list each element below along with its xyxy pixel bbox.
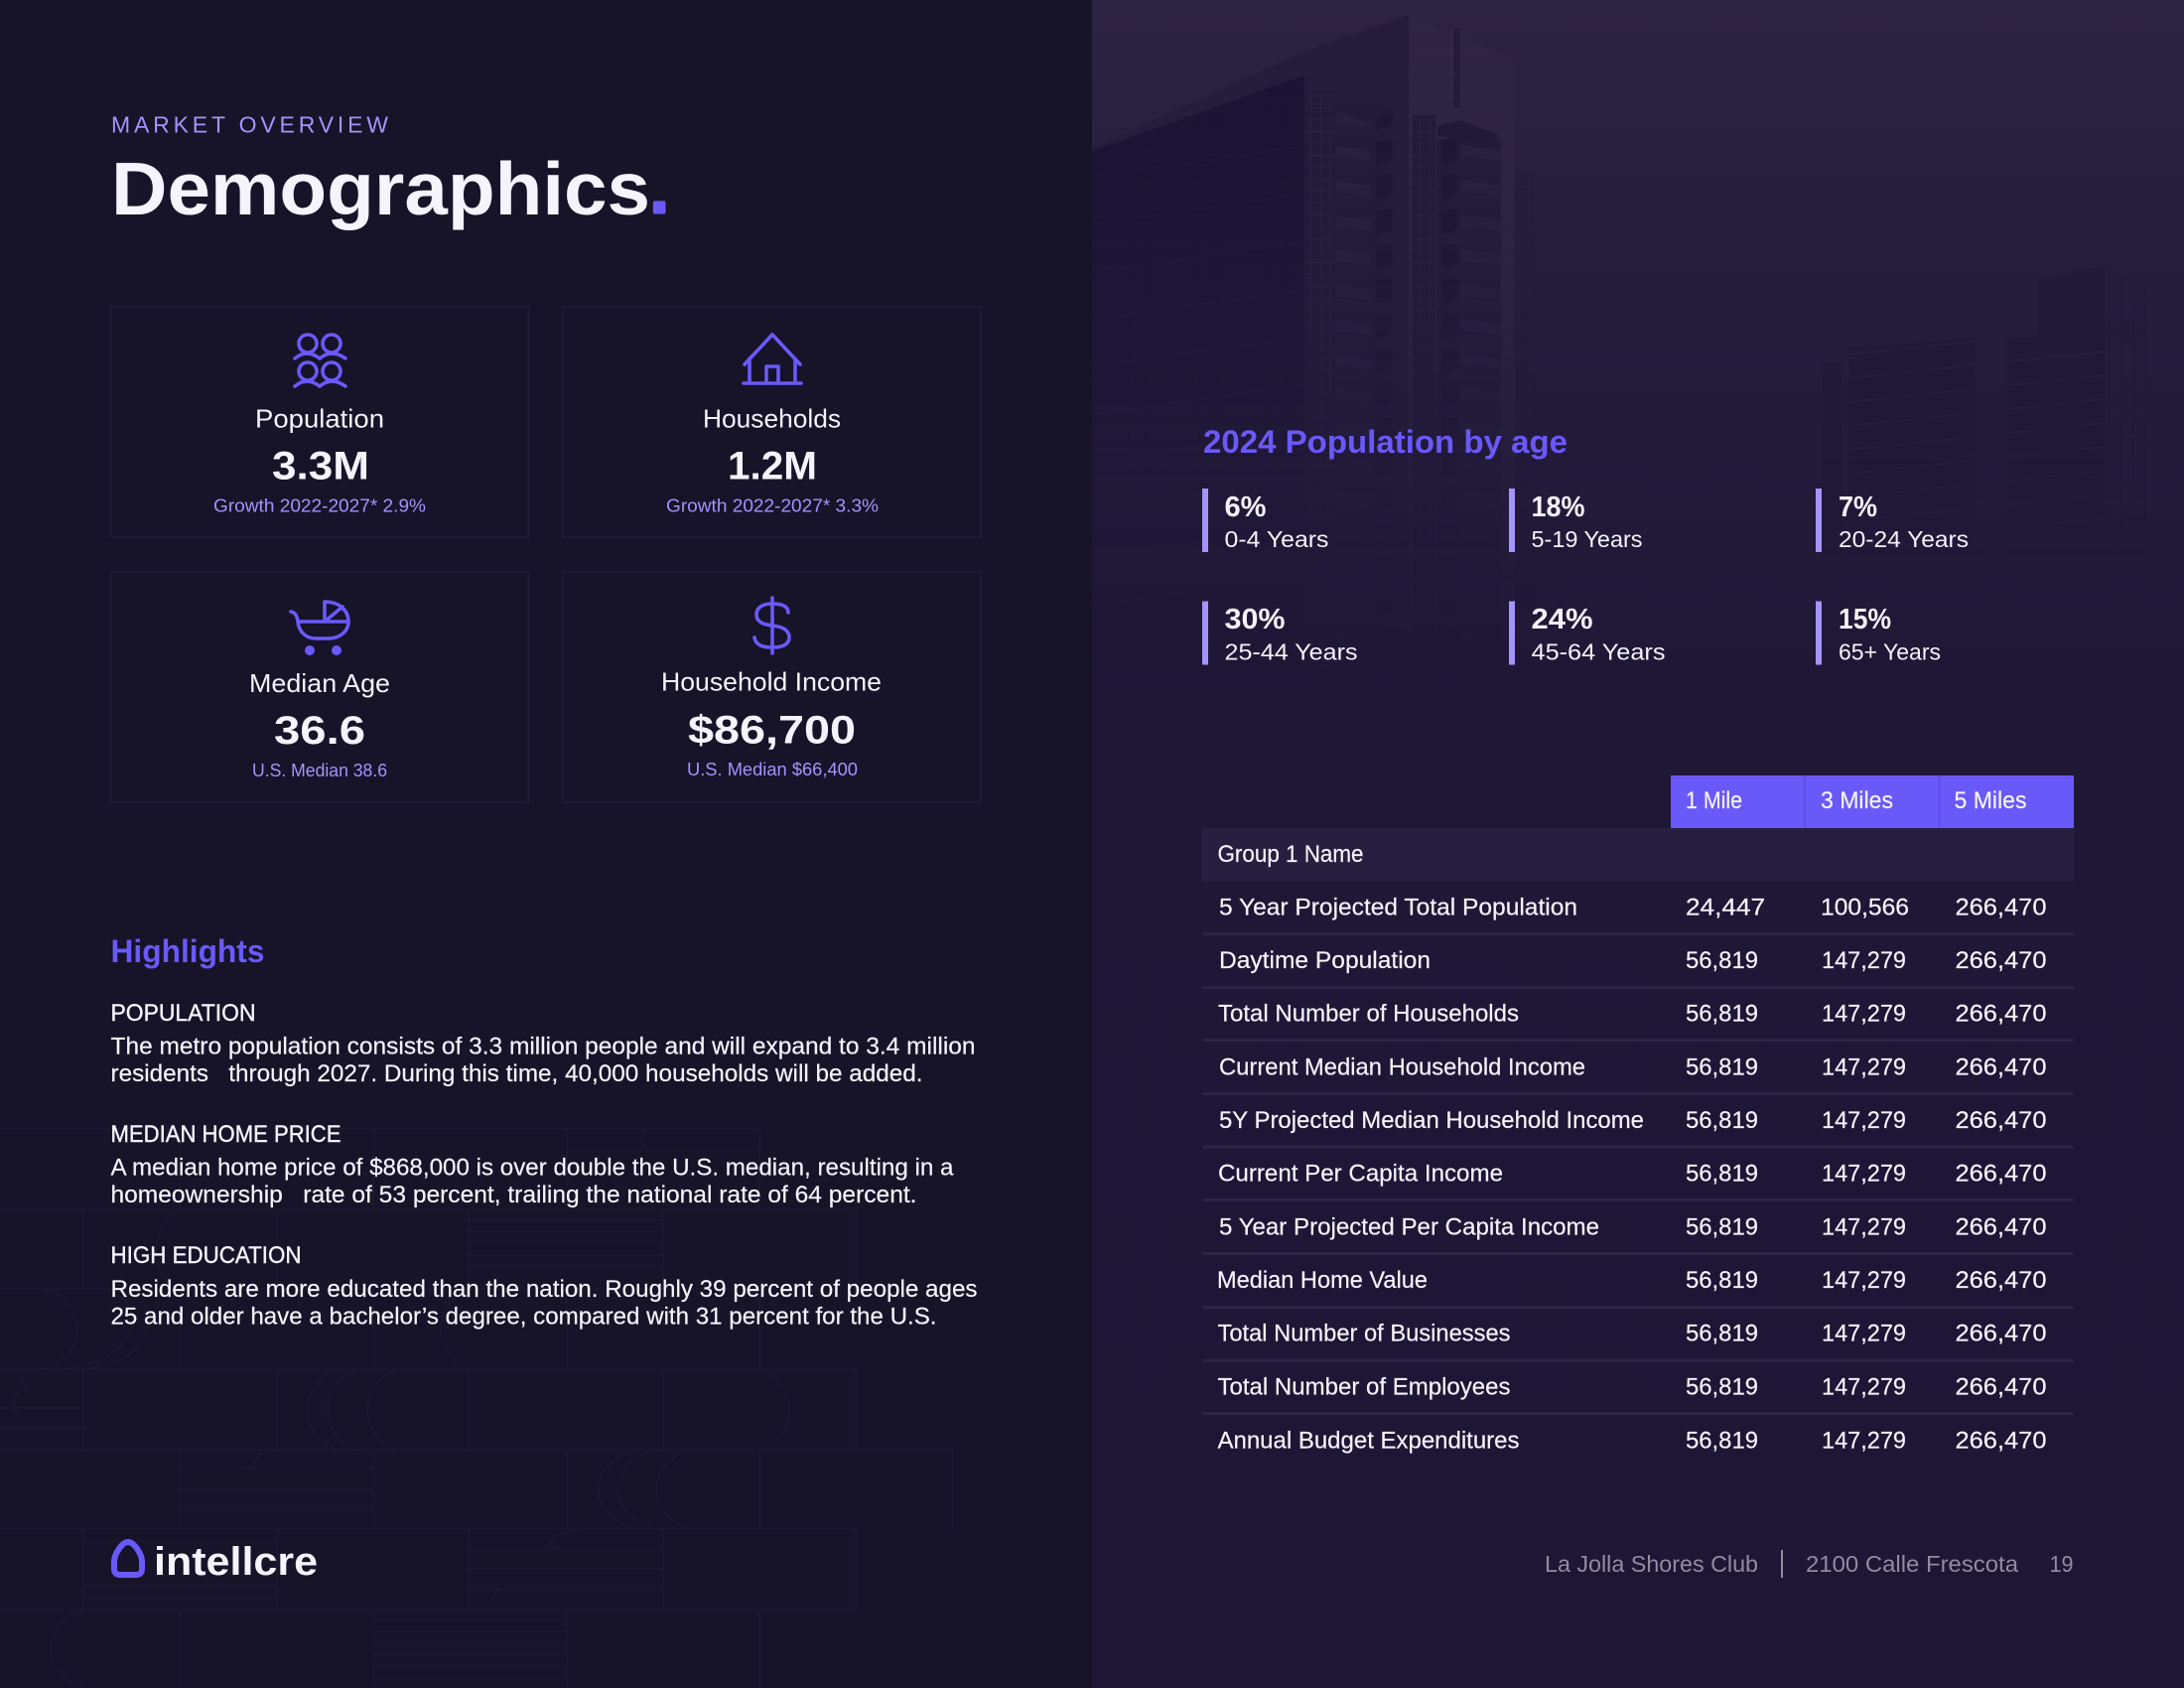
row: 5 year projected total population <box>1202 895 2074 935</box>
row: daytime population: 266,470 <box>1956 947 2047 974</box>
text block: population: residents through 2027. During this time, 40,000 households will be added. <box>111 1060 922 1087</box>
row: 5y projected median household income <box>1202 1107 2074 1148</box>
panel: right background <box>1092 0 2184 1688</box>
row: total number of businesses: 56,819 <box>1686 1321 1758 1347</box>
card: household income: Household Income <box>661 667 882 697</box>
text block: median home price: homeownership rate of 53 percent, trailing the national rate of 64 percent. <box>111 1182 916 1208</box>
card: median age: 36.6 <box>274 709 365 753</box>
card: households <box>563 307 981 537</box>
row: total number of households: 266,470 <box>1956 1001 2047 1028</box>
row: daytime population: Daytime Population <box>1219 947 1431 974</box>
text block: population <box>111 1000 976 1087</box>
card: median age: Median Age <box>249 668 390 698</box>
title: Demographics: . <box>650 152 669 227</box>
card: median age: U.S. Median 38.6 <box>252 761 387 780</box>
card: population: Growth 2022-2027* 2.9% <box>213 496 426 516</box>
stat: 30% 25-44 years: 25-44 Years <box>1225 639 1358 665</box>
row: current per capita income: 147,279 <box>1822 1161 1906 1188</box>
stat: 7% 20-24 years: 7% <box>1839 492 1877 523</box>
row: median home value: 56,819 <box>1686 1267 1758 1294</box>
stat: 7% 20-24 years <box>1816 489 1969 552</box>
table <box>1202 775 2074 1454</box>
panel: left background <box>0 0 1092 1688</box>
row: 5y projected median household income: 56,819 <box>1686 1107 1758 1134</box>
card: households: Growth 2022-2027* 3.3% <box>666 496 879 516</box>
row: total number of employees <box>1202 1373 2074 1415</box>
text block: high education: 25 and older have a bachelor’s degree, compared with 31 percent for the U.S. <box>111 1303 937 1331</box>
stat: 15% 65+ years: 65+ Years <box>1839 639 1941 665</box>
row: current per capita income <box>1202 1161 2074 1201</box>
card: households: 1.2M <box>728 445 817 489</box>
row: median home value: 266,470 <box>1956 1267 2047 1294</box>
stat: 24% 45-64 years <box>1509 602 1666 665</box>
icon: people <box>295 335 345 386</box>
stat: 30% 25-44 years <box>1202 602 1358 665</box>
row: median home value: 147,279 <box>1822 1267 1906 1294</box>
row: 5 year projected total population: 5 Year Projected Total Population <box>1219 895 1577 921</box>
row: total number of businesses: 266,470 <box>1956 1321 2047 1347</box>
row: annual budget expenditures <box>1217 1428 2047 1454</box>
footer: 2100 Calle Frescota <box>1806 1551 2018 1577</box>
row: total number of businesses: 147,279 <box>1822 1321 1906 1347</box>
text block: population: POPULATION <box>111 1000 256 1027</box>
row: 5y projected median household income: 5Y Projected Median Household Income <box>1219 1107 1644 1134</box>
decorative brick line pattern <box>0 1129 953 1688</box>
stat: 6% 0-4 years <box>1202 489 1328 552</box>
text block: population: The metro population consists of 3.3 million people and will expand to 3.4 million <box>111 1033 976 1060</box>
building photo: background towers <box>1823 265 2146 556</box>
table header <box>1671 775 2074 828</box>
icon: dollar <box>754 598 789 653</box>
row: current median household income: Current Median Household Income <box>1219 1054 1585 1080</box>
card: population <box>111 307 528 537</box>
stat: 18% 5-19 years <box>1509 489 1642 552</box>
text block: median home price <box>111 1121 954 1208</box>
card: median age <box>111 572 528 802</box>
icon: stroller <box>291 602 348 653</box>
row: total number of employees: 147,279 <box>1822 1373 1906 1400</box>
row: current per capita income: Current Per Capita Income <box>1218 1161 1503 1188</box>
card: households: Households <box>703 403 841 433</box>
stat: 15% 65+ years <box>1816 602 1941 665</box>
row: 5 year projected per capita income: 5 Year Projected Per Capita Income <box>1219 1213 1599 1240</box>
row: daytime population: 147,279 <box>1822 947 1906 974</box>
stat: 18% 5-19 years: 5-19 Years <box>1531 526 1642 552</box>
row: total number of households: 56,819 <box>1686 1001 1758 1028</box>
text block: median home price: MEDIAN HOME PRICE <box>111 1121 341 1148</box>
row: 5 year projected total population: 266,470 <box>1956 895 2047 921</box>
text block: high education <box>111 1242 977 1331</box>
row: 5y projected median household income: 266,470 <box>1956 1107 2047 1134</box>
row: current per capita income: 266,470 <box>1956 1161 2047 1188</box>
row: annual budget expenditures: 266,470 <box>1956 1428 2047 1454</box>
stat: 6% 0-4 years: 0-4 Years <box>1225 526 1328 552</box>
row: current median household income <box>1202 1054 2074 1095</box>
table header: 1 Mile <box>1686 787 1742 814</box>
text block: high education: HIGH EDUCATION <box>111 1242 302 1269</box>
row: total number of businesses <box>1202 1321 2074 1362</box>
row: total number of households: 147,279 <box>1822 1001 1906 1028</box>
stat: 24% 45-64 years: 24% <box>1531 604 1593 635</box>
card: household income <box>563 572 981 802</box>
logo: intellcre: intellcre <box>154 1540 318 1584</box>
footer: La Jolla Shores Club <box>1545 1551 1758 1577</box>
footer <box>1545 1550 2073 1578</box>
row: 5 year projected per capita income: 147,279 <box>1822 1213 1906 1240</box>
card: population: Population <box>255 403 384 433</box>
stat: 15% 65+ years: 15% <box>1839 604 1891 635</box>
table header: 3 Miles <box>1821 787 1893 814</box>
table header: 5 Miles <box>1954 787 2027 814</box>
stat: 18% 5-19 years: 18% <box>1531 492 1585 523</box>
row: total number of employees: Total Number of Employees <box>1217 1373 1511 1400</box>
stat: 6% 0-4 years: 6% <box>1225 492 1267 523</box>
heading: highlights: Highlights <box>111 933 264 969</box>
row: current median household income: 266,470 <box>1956 1054 2047 1080</box>
row: total number of businesses: Total Number of Businesses <box>1217 1321 1511 1347</box>
row: current per capita income: 56,819 <box>1686 1161 1758 1188</box>
row: daytime population <box>1202 947 2074 989</box>
card: household income: U.S. Median $66,400 <box>687 760 858 779</box>
building photo: main tower <box>1092 26 1499 288</box>
row: total number of households: Total Number of Households <box>1218 1001 1519 1028</box>
icon: house <box>744 335 801 383</box>
row: 5 year projected per capita income <box>1202 1213 2074 1255</box>
stat: 30% 25-44 years: 30% <box>1225 604 1286 635</box>
row: annual budget expenditures: 56,819 <box>1686 1428 1758 1454</box>
row: median home value <box>1202 1267 2074 1309</box>
row: annual budget expenditures: 147,279 <box>1822 1428 1906 1454</box>
row: daytime population: 56,819 <box>1686 947 1758 974</box>
stat: 7% 20-24 years: 20-24 Years <box>1839 526 1969 552</box>
card: household income: $86,700 <box>688 709 856 753</box>
row: 5 year projected per capita income: 56,819 <box>1686 1213 1758 1240</box>
row: total number of employees: 56,819 <box>1686 1373 1758 1400</box>
heading: 2024 population by age: 2024 Population by age <box>1203 424 1568 460</box>
eyebrow: market overview: MARKET OVERVIEW <box>111 111 388 137</box>
table group row: Group 1 Name <box>1217 841 1364 868</box>
row: 5 year projected total population: 24,447 <box>1686 895 1765 921</box>
stat: 24% 45-64 years: 45-64 Years <box>1531 639 1666 665</box>
row: annual budget expenditures: Annual Budget Expenditures <box>1217 1428 1519 1454</box>
row: current median household income: 147,279 <box>1822 1054 1906 1080</box>
row: current median household income: 56,819 <box>1686 1054 1758 1080</box>
table group row <box>1202 828 2074 882</box>
footer: 19 <box>2049 1551 2073 1577</box>
title: Demographics: Demographics <box>111 147 650 230</box>
row: 5 year projected total population: 100,566 <box>1821 895 1909 921</box>
text block: median home price: A median home price of $868,000 is over double the U.S. median, resulting in a <box>111 1154 954 1182</box>
row: median home value: Median Home Value <box>1217 1267 1428 1294</box>
row: 5y projected median household income: 147,279 <box>1822 1107 1906 1134</box>
row: 5 year projected per capita income: 266,470 <box>1956 1213 2047 1240</box>
text block: high education: Residents are more educated than the nation. Roughly 39 percent of people ages <box>111 1276 977 1303</box>
row: total number of households <box>1202 1001 2074 1042</box>
row: total number of employees: 266,470 <box>1956 1373 2047 1400</box>
card: population: 3.3M <box>272 445 369 489</box>
